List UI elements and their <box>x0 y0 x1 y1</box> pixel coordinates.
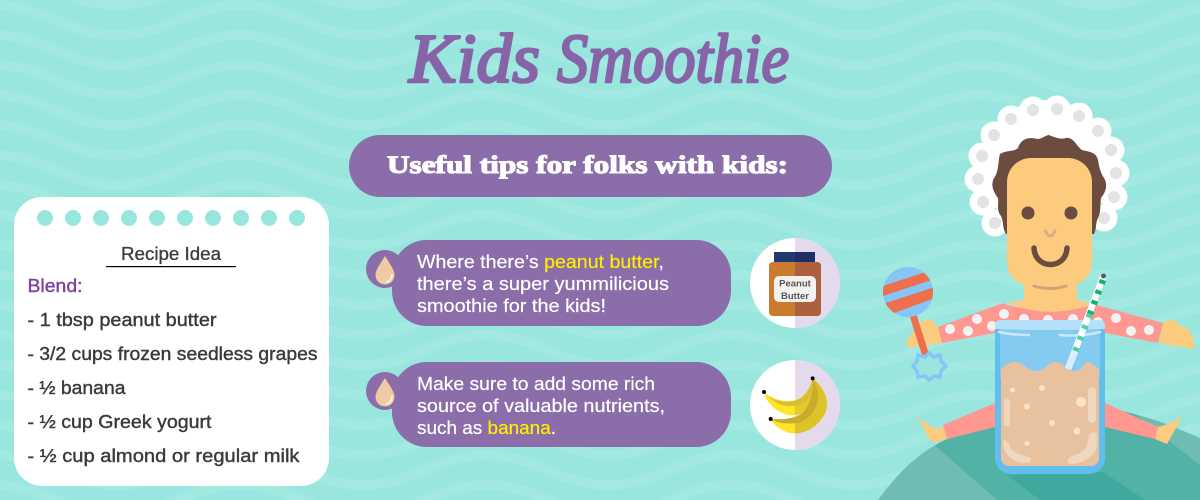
chin line <box>1034 286 1066 288</box>
icon: drop <box>376 256 394 284</box>
tip 2 text: source of valuable nutrients, <box>417 395 665 416</box>
banner heading: Useful tips for folks with kids: <box>387 152 788 179</box>
eyes <box>1022 206 1078 220</box>
rattle <box>880 267 946 380</box>
icon: peanut butter jar <box>750 238 840 328</box>
bubbles <box>1010 385 1086 446</box>
romper arms and polka dots <box>938 300 1163 360</box>
hands <box>907 319 1194 349</box>
recipe label: blend: Blend: <box>28 275 82 296</box>
tip 2 text: Make sure to add some rich <box>417 373 655 394</box>
panel: recipe card <box>14 197 329 486</box>
tip 2 bubble <box>366 362 731 447</box>
smile <box>1034 248 1067 264</box>
nose <box>1046 231 1055 236</box>
smoothie fill <box>1001 362 1099 466</box>
baby illustration <box>880 96 1194 474</box>
ingredient list: - ½ banana <box>28 377 126 398</box>
feet <box>917 417 1182 444</box>
title <box>408 21 789 98</box>
icon: peanut butter jar: Butter <box>781 291 809 302</box>
icon: bananas <box>750 360 840 450</box>
tip 1 text <box>417 251 669 316</box>
bonnet <box>964 96 1130 236</box>
title: Kids <box>408 21 540 98</box>
tip 1 text: Where there’s peanut butter , <box>417 251 664 272</box>
icon: peanut butter jar: Peanut <box>779 278 812 290</box>
ingredient list: - ½ cup almond or regular milk <box>28 445 300 466</box>
hill <box>878 412 1200 500</box>
hair <box>992 135 1106 234</box>
straw <box>1068 274 1106 369</box>
ingredient list <box>28 309 318 466</box>
legs <box>943 403 1158 439</box>
ingredient list: - 1 tbsp peanut butter <box>28 309 217 330</box>
glass rim <box>995 320 1105 330</box>
binder holes <box>37 210 305 226</box>
tip 1 bubble <box>366 240 731 326</box>
highlights <box>1003 387 1097 464</box>
face <box>1007 158 1092 286</box>
icon: drop <box>376 378 394 406</box>
tip 1 text: smoothie for the kids! <box>417 295 606 316</box>
tip 2 text <box>417 373 665 438</box>
tip 2 text: such as banana. <box>417 417 556 438</box>
recipe heading: Recipe Idea <box>121 243 222 264</box>
tip 1 text: there’s a super yummilicious <box>417 273 669 294</box>
smoothie glass <box>995 274 1106 474</box>
banner: useful tips <box>349 135 832 197</box>
ingredient list: - 3/2 cups frozen seedless grapes <box>28 343 318 364</box>
ingredient list: - ½ cup Greek yogurt <box>28 411 212 432</box>
neck <box>1024 270 1077 315</box>
title: Smoothie <box>557 21 789 98</box>
rim glints <box>999 332 1100 336</box>
